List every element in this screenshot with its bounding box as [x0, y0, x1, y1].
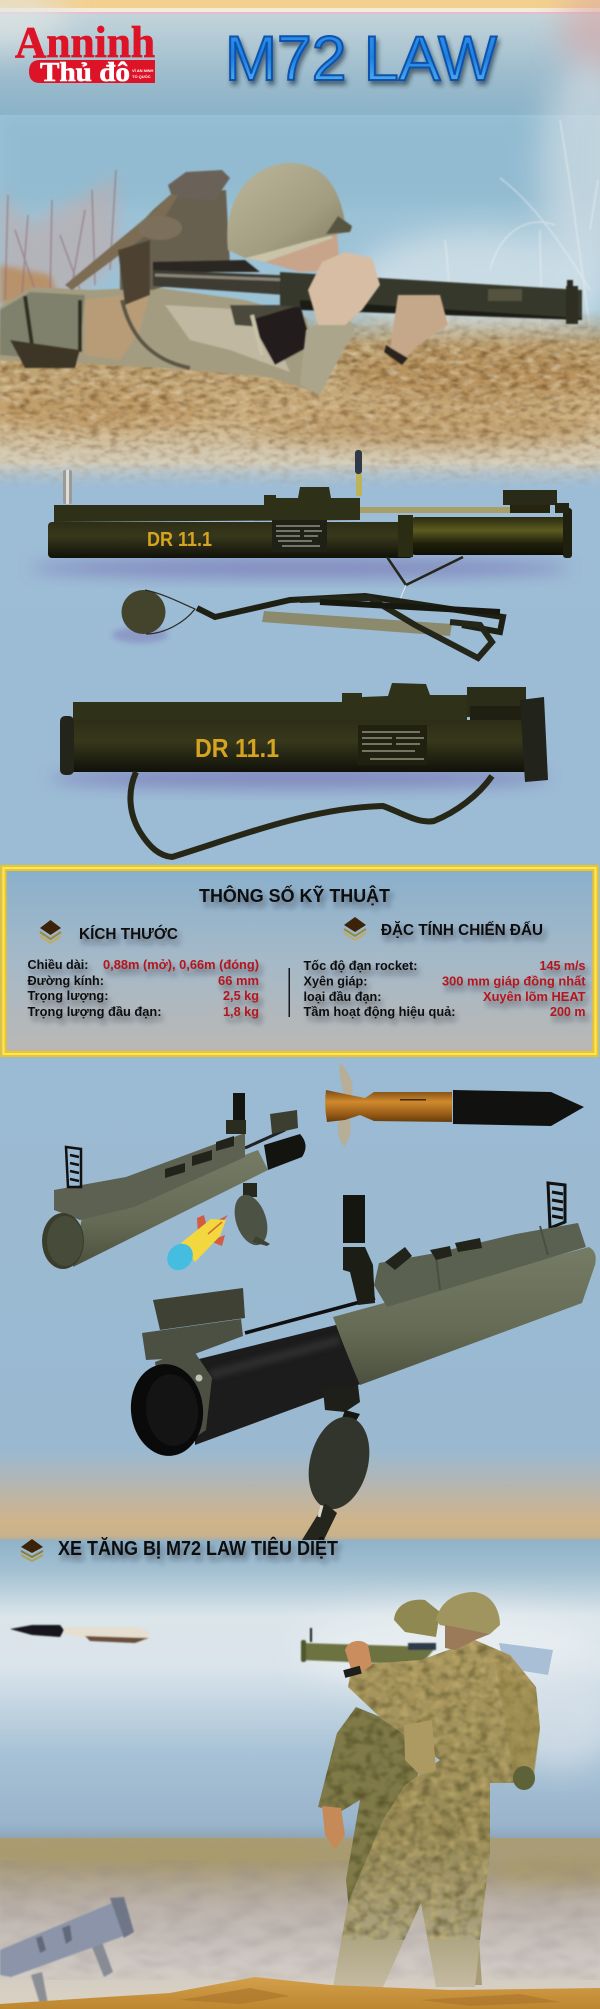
rail [245, 1298, 375, 1333]
yellow body [181, 1219, 226, 1262]
panel frame [4, 868, 596, 1054]
launcher body [48, 487, 572, 558]
small rocket icon [162, 1215, 228, 1275]
red fins [197, 1215, 228, 1246]
front sight post [343, 1195, 375, 1305]
top block [54, 1133, 245, 1220]
wire loop [145, 590, 195, 634]
dimension rows: 66 mm [218, 973, 259, 988]
sights and rods [63, 450, 557, 513]
rear sight [233, 1093, 245, 1127]
dimension rows: Trọng lượng đầu đạn: [28, 1004, 162, 1019]
dimension rows: 0,88m (mở), 0,66m (đóng) [103, 957, 259, 972]
combat rows: loại đầu đạn: [304, 989, 382, 1004]
fins [338, 1062, 353, 1147]
technical specification panel [4, 868, 596, 1054]
back soldier [310, 1600, 482, 1985]
sling straps [197, 596, 503, 632]
hinge [323, 1385, 360, 1412]
instruction label [358, 725, 427, 765]
front soldier [330, 1592, 545, 1987]
stencil text: DR 11.1 [147, 529, 212, 551]
muzzle opening [126, 1360, 208, 1460]
desert sand foreground [0, 1977, 600, 2009]
top header band [0, 0, 600, 115]
muzzle [42, 1213, 84, 1269]
tan band [262, 611, 452, 636]
helmet [436, 1592, 500, 1634]
dimension rows: 1,8 kg [223, 1004, 259, 1019]
heading: tank destroyed by M72 LAW [21, 1536, 338, 1561]
rear box [270, 1110, 298, 1134]
icon: layers [21, 1539, 43, 1561]
icon: layers right [344, 917, 366, 940]
hand on launcher [345, 1641, 372, 1672]
pack and shoulder strap [65, 170, 230, 305]
end cap with sling [122, 590, 503, 658]
rear tube of launcher [499, 1643, 553, 1675]
title: M72 LAW [225, 24, 498, 94]
combat rows [304, 958, 586, 1019]
launcher held by soldier [153, 260, 582, 324]
dimension rows: Trọng lượng: [28, 988, 108, 1003]
dimension rows [28, 957, 259, 1019]
black warhead [453, 1090, 584, 1126]
hero photo: prone soldier with M72 [0, 60, 600, 490]
logo: An ninh Thu do: Anninh [15, 18, 155, 67]
combat rows: Tầm hoạt động hiệu quả: [304, 1004, 456, 1019]
rocket cutaway: copper and black warhead [325, 1062, 584, 1147]
panel heading: THÔNG SỐ KỸ THUẬT [199, 885, 390, 906]
hazy field [0, 1838, 600, 2009]
combat rows: 300 mm giáp đồng nhất [442, 974, 586, 988]
combat rows: 200 m [550, 1004, 586, 1019]
launcher on shoulder [301, 1628, 436, 1665]
logo: An ninh Thu do: TỔ QUỐC [132, 74, 151, 79]
sky [0, 1540, 600, 1845]
inner black tube [264, 1134, 306, 1170]
icon: layers left [40, 920, 61, 943]
large launcher illustration [126, 1183, 596, 1552]
rocket in flight [10, 1625, 149, 1643]
logo: An ninh Thu do: VÌ AN NINH [132, 68, 154, 73]
combat rows: Tốc độ đạn rocket: [304, 958, 418, 973]
small launcher illustration [42, 1093, 306, 1269]
dimension rows: Đường kính: [28, 973, 104, 988]
soldier body [0, 170, 318, 393]
combat rows: Xuyên lõm HEAT [483, 989, 586, 1004]
front sight ladder [66, 1147, 81, 1187]
column divider [288, 968, 290, 1017]
helmet and face [227, 163, 352, 272]
heading text: XE TĂNG BỊ M72 LAW TIÊU DIỆT [58, 1536, 338, 1560]
flip cover [299, 1410, 379, 1552]
olive tube [333, 1247, 596, 1385]
humps [165, 1136, 234, 1178]
M72 launcher photo: open side view [30, 450, 572, 788]
dimension rows: 2,5 kg [223, 988, 259, 1003]
sight box [142, 1288, 245, 1360]
instruction label [272, 520, 327, 552]
cap [122, 590, 166, 634]
humps [385, 1238, 482, 1270]
launcher body [60, 683, 548, 782]
rear sight ladder [548, 1183, 565, 1228]
combat rows: 145 m/s [540, 958, 586, 973]
dry grass [0, 120, 600, 490]
sky [0, 60, 600, 375]
flip cap [229, 1183, 273, 1249]
dimension rows: Chiều dài: [28, 957, 88, 972]
M72 launcher photo: closed side view [60, 683, 548, 857]
combat rows: Xyên giáp: [304, 974, 368, 988]
pouch [404, 1720, 436, 1775]
muzzle ring [155, 1348, 212, 1455]
discarded launcher [0, 1897, 134, 2004]
backpack [495, 1660, 540, 1785]
logo: An ninh Thu do: Thủ đô [40, 57, 130, 87]
subheading: dimensions: KÍCH THƯỚC [79, 925, 178, 943]
stencil text: DR 11.1 [195, 733, 279, 763]
blue nose [162, 1239, 198, 1275]
hands and forearms [300, 252, 448, 395]
olive tube [73, 1150, 268, 1267]
carrying strap [130, 772, 492, 857]
subheading: combat characteristics: ĐẶC TÍNH CHIẾN ĐẤU [381, 922, 543, 939]
black tube [195, 1323, 366, 1445]
copper body [325, 1090, 452, 1122]
battlefield photo: two soldiers firing M72 [0, 1540, 600, 2009]
upper receiver [374, 1223, 586, 1307]
lanyard [387, 557, 463, 612]
launcher shadow [30, 559, 570, 788]
